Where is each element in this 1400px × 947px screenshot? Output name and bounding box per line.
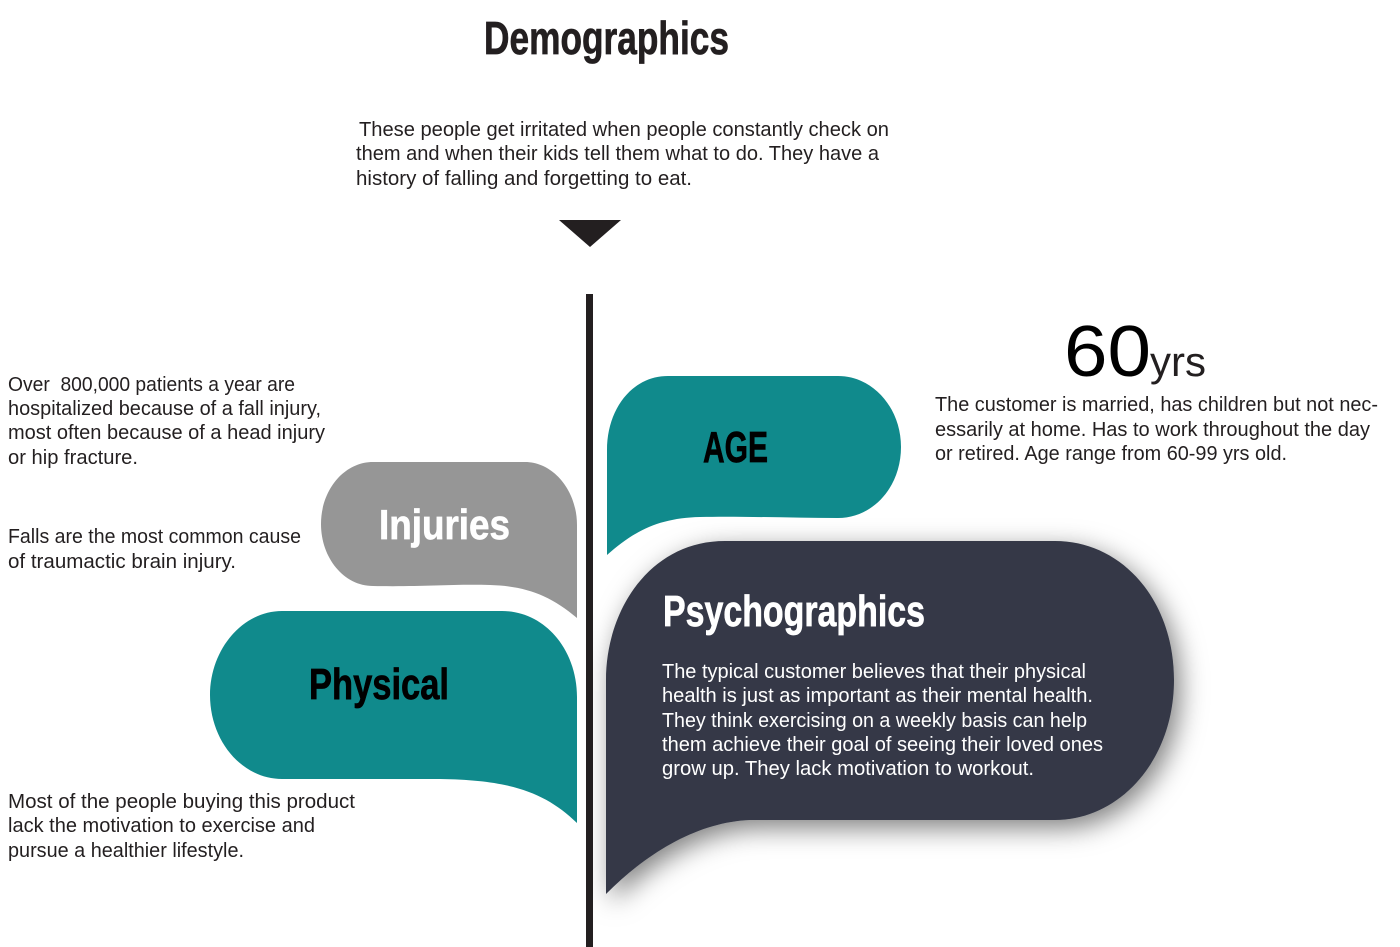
stat: 60 yrs [1064,312,1206,392]
physical text: Most of the people buying this product [8,791,355,813]
psychographics text: The typical customer believes that their physical [662,661,1086,683]
stat: 60 yrs: yrs [1150,338,1206,385]
injuries text: hospitalized because of a fall injury, [8,398,321,420]
title: Demographics [484,12,729,64]
physical text: pursue a healthier lifestyle. [8,840,244,862]
psychographics text: grow up. They lack motivation to workout. [662,758,1034,780]
intro text block: These people get irritated when people constantly check on [359,119,889,141]
panel: age bubble [607,376,901,555]
injuries text: Over 800,000 patients a year are [8,374,295,396]
stat: 60 yrs: 60 [1064,312,1151,392]
psychographics heading: Psychographics [663,587,925,636]
psychographics text: health is just as important as their mental health. [662,685,1093,707]
psychographics text: They think exercising on a weekly basis can help [662,710,1087,732]
injuries text: of traumactic brain injury. [8,551,236,573]
psychographics text: them achieve their goal of seeing their loved ones [662,734,1103,756]
injuries text [8,374,325,573]
panel: psychographics bubble [606,541,1174,894]
age description [935,394,1378,465]
age description: The customer is married, has children but not nec- [935,394,1378,416]
intro text block [356,119,889,190]
intro text block: history of falling and forgetting to eat. [356,168,692,190]
physical text [8,791,355,862]
intro text block: them and when their kids tell them what to do. They have a [356,143,880,165]
arrow: down triangle [559,220,621,247]
physical text: lack the motivation to exercise and [8,815,315,837]
injuries text: most often because of a head injury [8,422,325,444]
age description: or retired. Age range from 60-99 yrs old. [935,443,1287,465]
panel: injuries bubble [321,462,577,618]
panel: age bubble: AGE [703,423,768,472]
age description: essarily at home. Has to work throughout the day [935,419,1370,441]
panel: injuries bubble: Injuries [379,501,510,548]
injuries text: Falls are the most common cause [8,526,301,548]
psychographics text [662,661,1103,780]
injuries text: or hip fracture. [8,447,138,469]
panel: physical bubble: Physical [309,660,449,709]
center vertical line [586,294,593,947]
panel: physical bubble [210,611,577,823]
